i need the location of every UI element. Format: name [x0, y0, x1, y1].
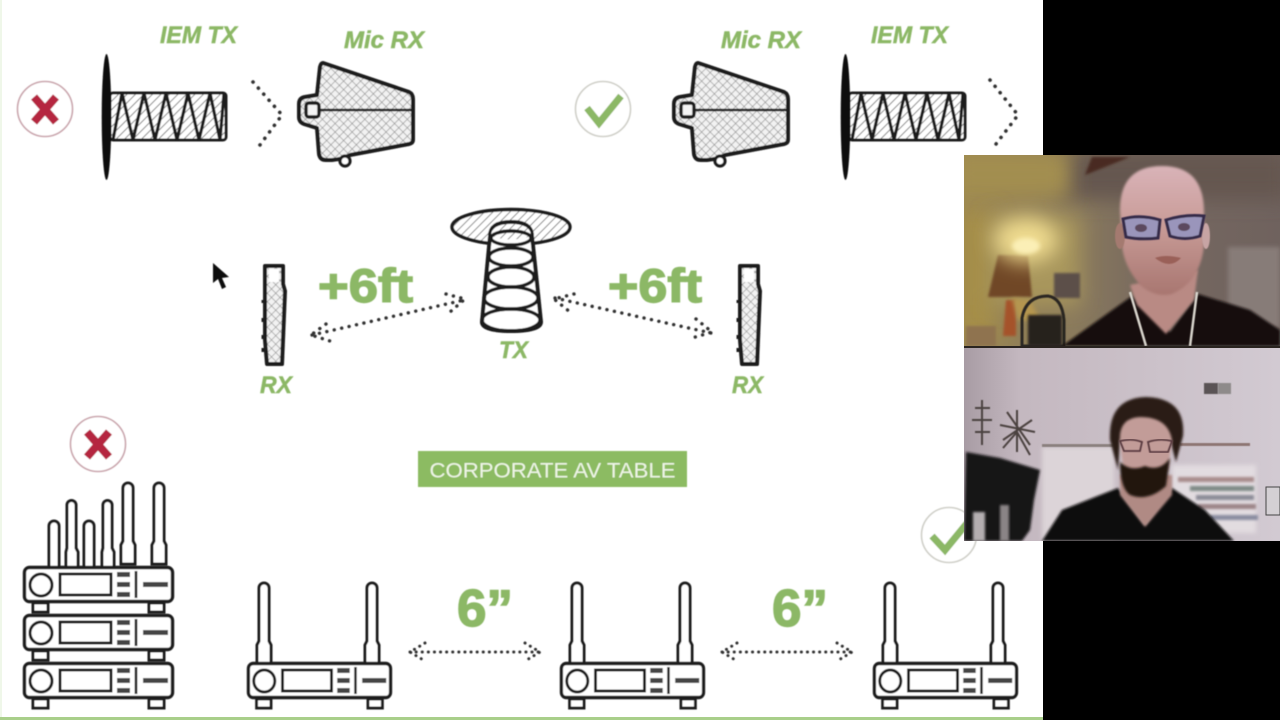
icon: RX side-view paddle right [739, 266, 760, 364]
label: TX: TX [499, 337, 530, 364]
icon: RX side-view paddle left [264, 266, 285, 364]
slide content [18, 22, 1018, 708]
slide bottom green rule [0, 717, 1043, 720]
arrow: dotted chevron right [990, 80, 1018, 148]
person: bearded man [1042, 397, 1234, 541]
icon: stacked receivers with antennas [24, 483, 172, 708]
icon: IEM transmitter antenna right [841, 54, 965, 180]
arrow: dotted chevron left [253, 82, 282, 149]
icon: TX helical antenna [452, 210, 570, 331]
wrong icon: top left [18, 82, 72, 136]
label: Mic RX left: Mic RX [344, 27, 426, 54]
icon: mouse cursor [213, 263, 229, 289]
person: man in glasses [1062, 166, 1280, 346]
icon: IEM transmitter antenna left [102, 54, 226, 180]
arrow: dotted double arrow left [311, 294, 465, 341]
label: IEM TX right: IEM TX [871, 22, 950, 49]
heading: corporate AV table: CORPORATE AV TABLE [430, 458, 676, 482]
label: IEM TX left: IEM TX [160, 22, 239, 49]
label: +6ft left: +6ft [318, 259, 413, 312]
label: RX right: RX [732, 372, 765, 399]
icon: microphone receiver paddle left [299, 63, 413, 166]
room background [950, 150, 1280, 346]
label: +6ft right: +6ft [608, 259, 702, 312]
heading: corporate AV table [418, 451, 687, 487]
room background [964, 383, 1280, 541]
arrow: dotted double arrow 1 [410, 643, 540, 661]
correct icon: top [576, 82, 630, 136]
wrong icon: stacked receivers [70, 416, 126, 472]
icon: receiver 1 [248, 583, 391, 708]
icon: receiver 3 [874, 583, 1017, 708]
label: 6 inches left: 6” [457, 580, 513, 638]
arrow: dotted double arrow 2 [722, 643, 852, 661]
black panel below the bottom video [1043, 541, 1280, 720]
metal stands [972, 400, 1035, 455]
divider between videos [964, 346, 1280, 348]
label: RX left: RX [260, 372, 294, 399]
correct icon: bottom right [922, 508, 976, 562]
arrow: dotted double arrow right [554, 294, 712, 338]
panel: top webcam video [964, 155, 1280, 346]
icon: receiver 2 [561, 583, 704, 708]
icon: microphone receiver paddle right [674, 63, 788, 166]
panel: bottom webcam video [964, 348, 1280, 541]
label: 6 inches right: 6” [772, 580, 828, 638]
slide left edge tint [0, 0, 2, 717]
label: Mic RX right: Mic RX [721, 27, 803, 54]
